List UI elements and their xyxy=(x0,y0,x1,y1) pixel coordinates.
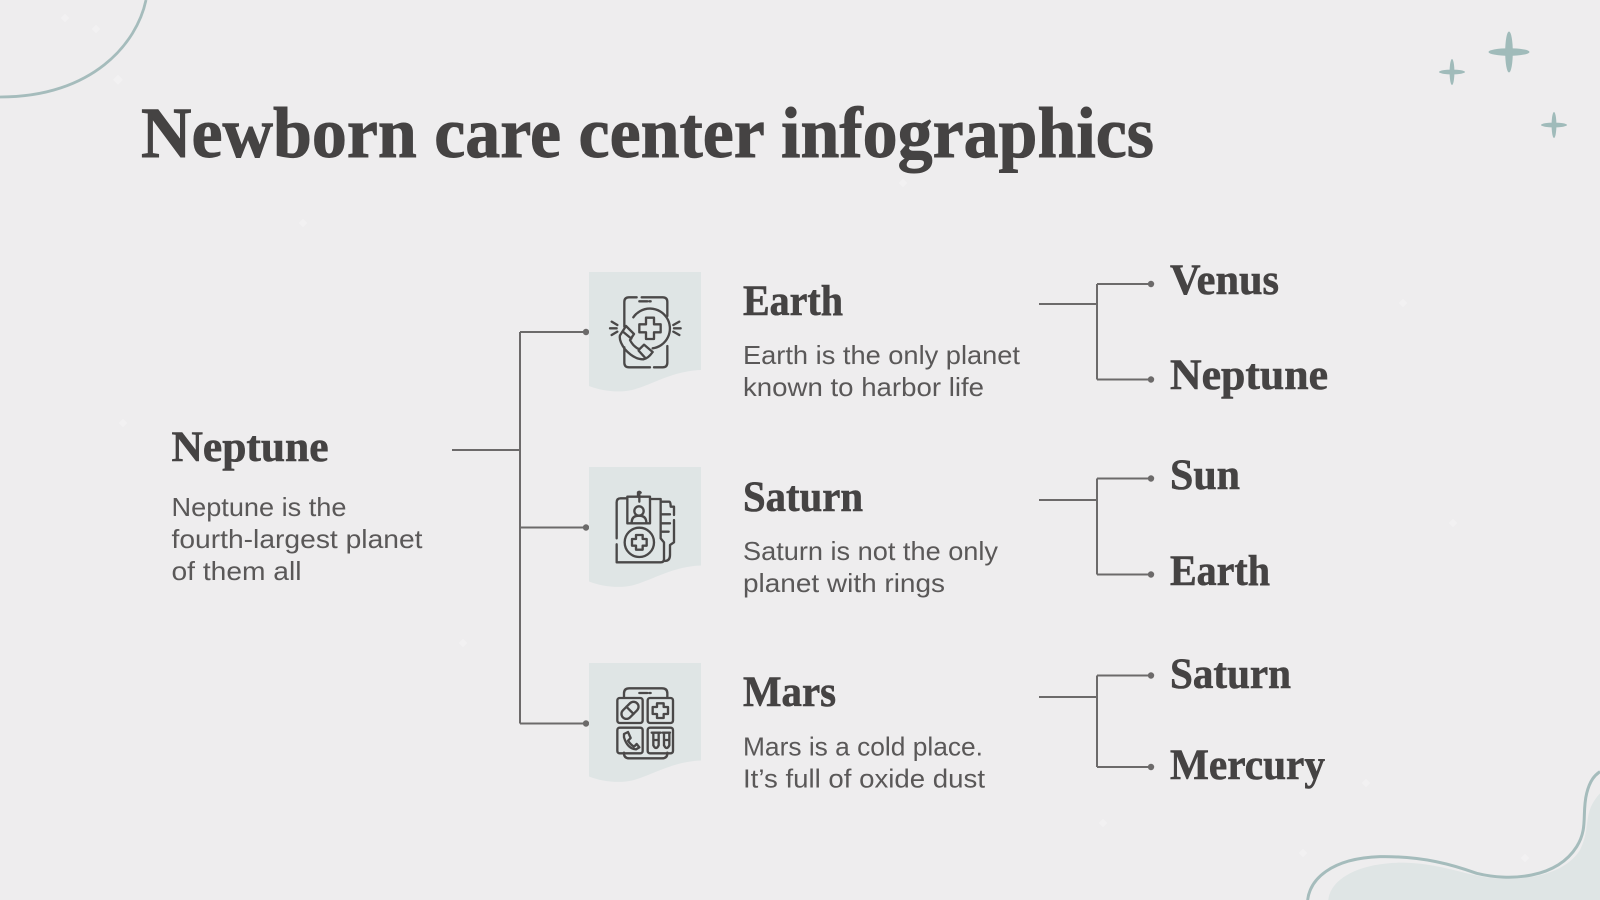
label: Neptune: Neptune xyxy=(1170,352,1328,399)
block: Saturn text xyxy=(743,474,998,598)
label: Earth: Earth xyxy=(1170,548,1270,595)
text: Mars description: It’s full of oxide dust xyxy=(743,764,986,794)
text: Saturn description: Saturn is not the only xyxy=(743,536,998,566)
label: Sun: Sun xyxy=(1170,452,1240,499)
heading: Saturn: Saturn xyxy=(743,474,863,521)
icon: phone with medical cross xyxy=(610,297,681,367)
panel: Mars icon tile xyxy=(589,663,701,782)
decorative sparkles: top right xyxy=(1439,32,1567,138)
title: Newborn care center infographics xyxy=(141,93,1154,173)
panel: Earth icon tile xyxy=(589,272,701,391)
text: Mars description: Mars is a cold place. xyxy=(743,732,983,762)
icon: phone with medical app tiles xyxy=(617,688,673,758)
heading: Mars: Mars xyxy=(743,669,836,716)
text: Earth description: Earth is the only planet xyxy=(743,340,1021,370)
label: Saturn: Saturn xyxy=(1170,651,1291,698)
text: Earth description: known to harbor life xyxy=(743,372,984,402)
decorative arc: top left xyxy=(0,0,146,97)
connector: Mars branches xyxy=(1039,672,1154,770)
text: Neptune description: of them all xyxy=(172,556,302,586)
connector: root to three branches xyxy=(452,329,589,727)
text: Saturn description: planet with rings xyxy=(743,568,945,598)
connector: Earth branches xyxy=(1039,281,1154,383)
icon: medical clipboard with ID xyxy=(617,492,674,562)
text: Neptune description: Neptune is the xyxy=(172,492,346,522)
block: Mars text xyxy=(743,669,986,794)
block: Neptune root xyxy=(172,424,423,586)
label: Mercury: Mercury xyxy=(1170,742,1325,789)
label: Venus: Venus xyxy=(1170,257,1279,304)
heading: Earth: Earth xyxy=(743,278,843,325)
text: Neptune description: fourth-largest planet xyxy=(172,524,423,554)
block: Earth text xyxy=(743,278,1021,402)
heading: Neptune: Neptune xyxy=(172,424,328,471)
panel: Saturn icon tile xyxy=(589,467,701,587)
decorative blob: bottom right xyxy=(1308,772,1600,900)
connector: Saturn branches xyxy=(1039,475,1154,578)
